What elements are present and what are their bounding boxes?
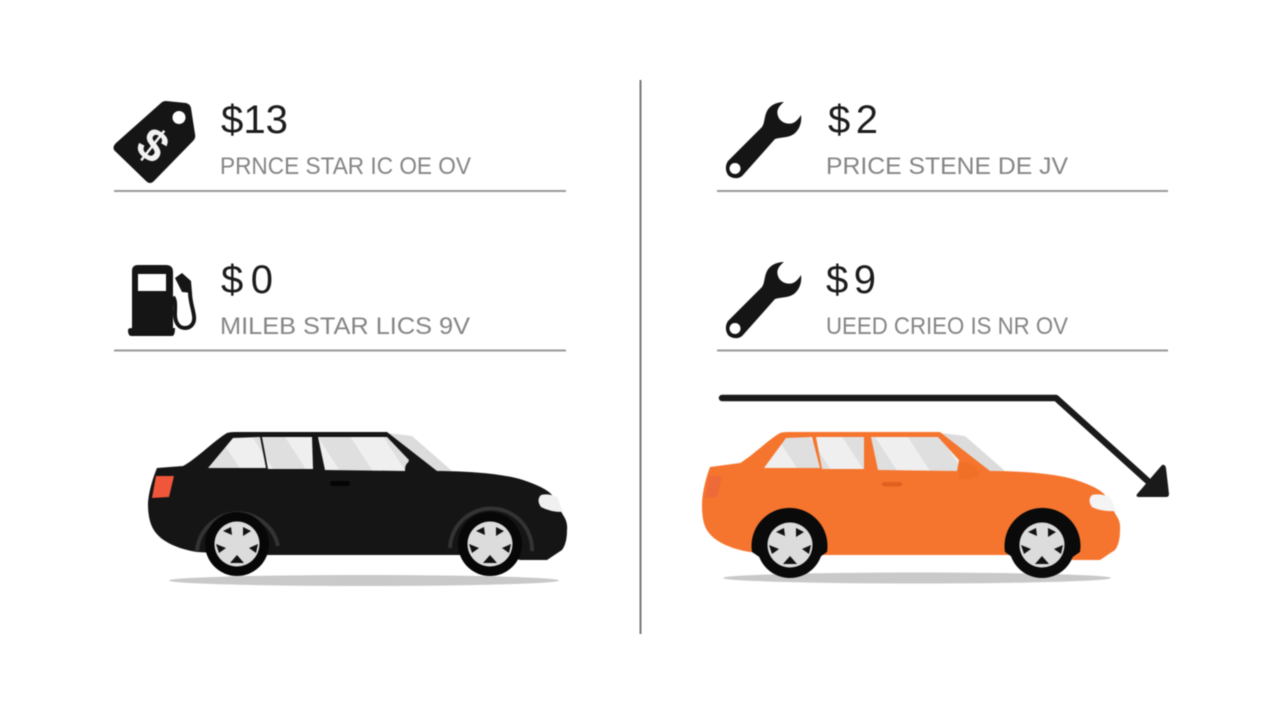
car: black [148, 432, 567, 586]
rear window [764, 437, 820, 468]
value: $2: $2 [828, 98, 878, 142]
ground shadow [723, 572, 1111, 584]
car: orange [702, 432, 1120, 584]
front window [871, 437, 959, 471]
windshield glare [941, 433, 1005, 471]
headlight [538, 494, 563, 512]
door handle [330, 481, 350, 486]
tail light [705, 476, 722, 498]
front wheel [458, 512, 522, 576]
icon: price tag [114, 101, 195, 183]
wheel arches [197, 508, 532, 551]
rear window [208, 437, 266, 468]
windshield glare [388, 433, 452, 471]
panel: right price row [717, 98, 1168, 191]
body [702, 432, 1120, 560]
rear wheel [752, 508, 828, 578]
icon: wrench [726, 262, 801, 338]
mirror [405, 461, 427, 478]
rear wheel [205, 512, 269, 576]
icon: wrench [726, 102, 801, 178]
panel: left price row [114, 98, 566, 191]
door handle [882, 482, 902, 486]
ground shadow [169, 575, 559, 586]
label: PRICE STENE DE JV [826, 153, 1068, 180]
label: PRNCE STAR IC OE OV [220, 153, 471, 180]
mirror [958, 462, 980, 480]
middle window [262, 437, 313, 469]
label: MILEB STAR LICS 9V [220, 313, 470, 340]
value: $13: $13 [221, 98, 288, 142]
arrow: downward trend [722, 398, 1169, 497]
icon: price tag: $ [127, 117, 179, 173]
middle window [816, 437, 864, 469]
tail light [152, 476, 174, 498]
front wheel [1005, 508, 1080, 578]
value: $0: $0 [221, 258, 273, 302]
value: $9: $9 [826, 258, 876, 302]
label: UEED CRIEO IS NR OV [826, 313, 1068, 340]
icon: fuel pump [128, 265, 194, 336]
front window [318, 437, 409, 471]
body [148, 432, 567, 560]
panel: left fuel row [114, 258, 566, 350]
panel: right repair row [717, 258, 1168, 350]
headlight [1090, 494, 1116, 511]
